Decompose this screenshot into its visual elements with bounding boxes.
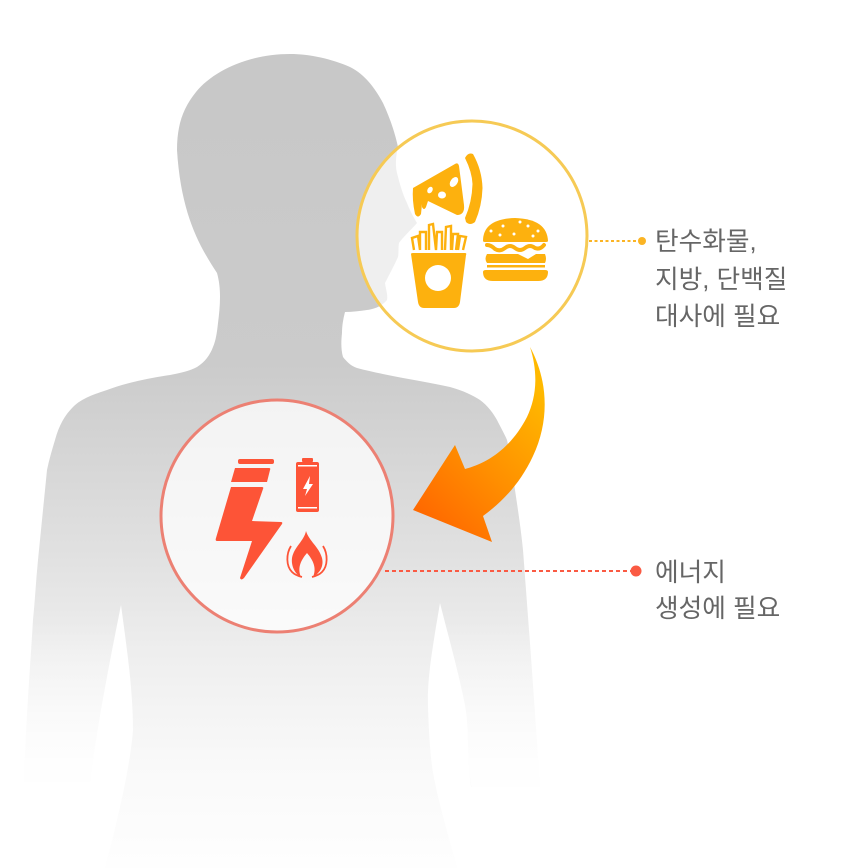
icon: battery bbox=[296, 458, 319, 512]
text: food label bbox=[655, 227, 787, 331]
connector: food label bbox=[589, 237, 646, 245]
text: energy label bbox=[655, 558, 780, 623]
connector: energy label bbox=[385, 566, 642, 576]
icon: pizza bbox=[413, 154, 482, 224]
text: food label: 대사에 필요 bbox=[655, 302, 780, 331]
arrow bbox=[413, 347, 545, 542]
text: energy label: 생성에 필요 bbox=[655, 594, 780, 623]
icon: french fries bbox=[411, 224, 466, 308]
icon: hamburger bbox=[483, 218, 548, 281]
text: food label: 탄수화물, bbox=[655, 227, 757, 256]
panel: energy circle bbox=[161, 400, 393, 632]
panel: food circle bbox=[357, 121, 587, 351]
text: food label: 지방, 단백질 bbox=[655, 265, 787, 294]
icon: lightning bolt bbox=[216, 459, 282, 580]
text: energy label: 에너지 bbox=[655, 558, 726, 587]
icon: flame bbox=[287, 531, 327, 577]
